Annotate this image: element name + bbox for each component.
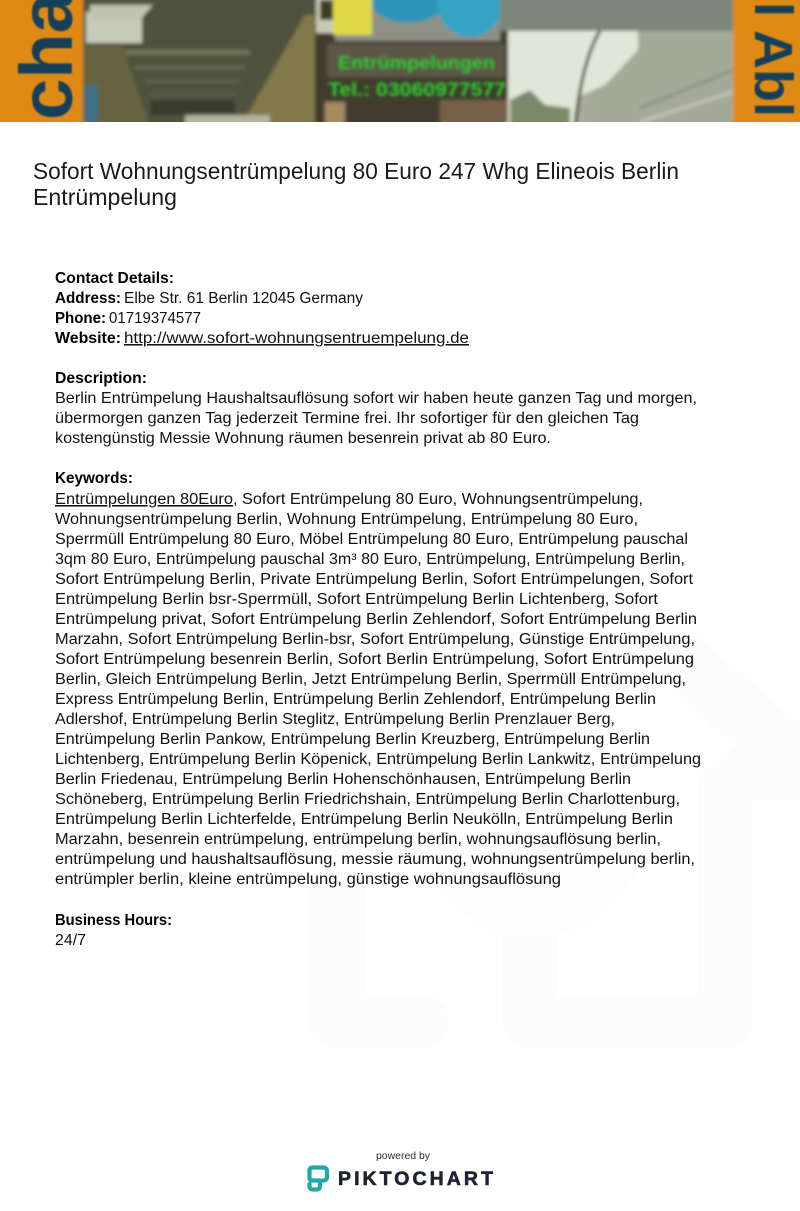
- header photo banner: [0, 0, 800, 127]
- centre panel: [314, 18, 506, 122]
- keywords: entrümpelung und haushaltsauflösung, messie räumung, wohnungsentrümpelung berlin,: [55, 851, 695, 868]
- keywords: Entrümpelung Berlin Pankow, Entrümpelung Berlin Kreuzberg, Entrümpelung Berlin: [55, 731, 650, 748]
- description: übermorgen ganzen Tag jederzeit Termine frei. Ihr sofortiger für den gleichen Tag: [55, 410, 639, 427]
- keywords: Adlershof, Entrümpelung Berlin Steglitz, Entrümpelung Berlin Prenzlauer Berg,: [55, 711, 615, 728]
- banner sign text: Entrümpelungen: [338, 53, 495, 73]
- keywords: Sofort Entrümpelung besenrein Berlin, Sofort Berlin Entrümpelung, Sofort Entrümpelung: [55, 651, 694, 668]
- keywords: Lichtenberg, Entrümpelung Berlin Köpenick, Entrümpelung Berlin Lankwitz, Entrümpelung: [55, 751, 701, 768]
- description: [55, 370, 697, 447]
- keywords: Sofort Entrümpelung Berlin, Private Entrümpelung Berlin, Sofort Entrümpelungen, Sofort: [55, 571, 694, 588]
- keywords: Marzahn, Sofort Entrümpelung Berlin-bsr, Sofort Entrümpelung, Günstige Entrümpelung,: [55, 631, 695, 648]
- contact details: 01719374577: [109, 310, 201, 327]
- contact details: [55, 270, 469, 347]
- powered by piktochart logo: powered by: [376, 1150, 431, 1162]
- title: Sofort Wohnungsentrümpelung 80 Euro 247 Whg Elineois Berlin: [33, 158, 679, 184]
- business hours: Business Hours:: [55, 912, 172, 929]
- orange side bands: [0, 0, 83, 127]
- keywords: Sperrmüll Entrümpelung 80 Euro, Möbel Entrümpelung 80 Euro, Entrümpelung pauschal: [55, 531, 688, 548]
- business hours: 24/7: [55, 932, 86, 949]
- keywords: Marzahn, besenrein entrümpelung, entrümpelung berlin, wohnungsauflösung berlin,: [55, 831, 661, 848]
- description: Description:: [55, 370, 147, 387]
- contact details: Elbe Str. 61 Berlin 12045 Germany: [124, 290, 363, 307]
- house watermark: [310, 637, 800, 1048]
- title: Entrümpelung: [33, 184, 177, 210]
- keywords: Berlin Friedenau, Entrümpelung Berlin Hohenschönhausen, Entrümpelung Berlin: [55, 771, 631, 788]
- keywords: Keywords:: [55, 470, 133, 487]
- contact details: Phone:: [55, 310, 106, 327]
- banner sign text: Tel.: 03060977577: [328, 80, 506, 101]
- description: kostengünstig Messie Wohnung räumen besenrein privat ab 80 Euro.: [55, 430, 551, 447]
- keywords: Entrümpelung Berlin Lichterfelde, Entrümpelung Berlin Neukölln, Entrümpelung Berlin: [55, 811, 673, 828]
- keywords: Entrümpelung Berlin bsr-Sperrmüll, Sofort Entrümpelung Berlin Lichtenberg, Sofort: [55, 591, 659, 608]
- contact details: Address:: [55, 290, 121, 307]
- keywords: Berlin, Gleich Entrümpelung Berlin, Jetzt Entrümpelung Berlin, Sperrmüll Entrümpelung,: [55, 671, 686, 688]
- title: [33, 158, 679, 210]
- business hours: [55, 912, 172, 949]
- keywords: Entrümpelung privat, Sofort Entrümpelung Berlin Zehlendorf, Sofort Entrümpelung Berlin: [55, 611, 697, 628]
- keywords: Entrümpelungen 80Euro: [55, 491, 233, 508]
- keywords: [55, 470, 701, 888]
- description: Berlin Entrümpelung Haushaltsauflösung sofort wir haben heute ganzen Tag und morgen,: [55, 390, 697, 407]
- contact details: http://www.sofort-wohnungsentruempelung.de: [124, 330, 469, 347]
- stairwell panel: [84, 0, 316, 127]
- keywords: Wohnungsentrümpelung Berlin, Wohnung Entrümpelung, Entrümpelung 80 Euro,: [55, 511, 638, 528]
- keywords: Schöneberg, Entrümpelung Berlin Friedrichshain, Entrümpelung Berlin Charlottenburg,: [55, 791, 680, 808]
- contact details: Contact Details:: [55, 270, 174, 287]
- keywords: 3qm 80 Euro, Entrümpelung pauschal 3m³ 80 Euro, Entrümpelung, Entrümpelung Berlin,: [55, 551, 685, 568]
- keywords: , Sofort Entrümpelung 80 Euro, Wohnungsentrümpelung,: [233, 491, 643, 508]
- keywords: entrümpler berlin, kleine entrümpelung, günstige wohnungsauflösung: [55, 871, 561, 888]
- banner sign text: [328, 53, 506, 101]
- wordmark: PIKTOCHART: [338, 1168, 493, 1190]
- keywords: Express Entrümpelung Berlin, Entrümpelung Berlin Zehlendorf, Entrümpelung Berlin: [55, 691, 656, 708]
- icon: piktochart mark: [310, 1168, 327, 1190]
- right photo panel: [500, 0, 735, 31]
- contact details: Website:: [55, 330, 121, 347]
- powered by piktochart logo: [310, 1150, 493, 1190]
